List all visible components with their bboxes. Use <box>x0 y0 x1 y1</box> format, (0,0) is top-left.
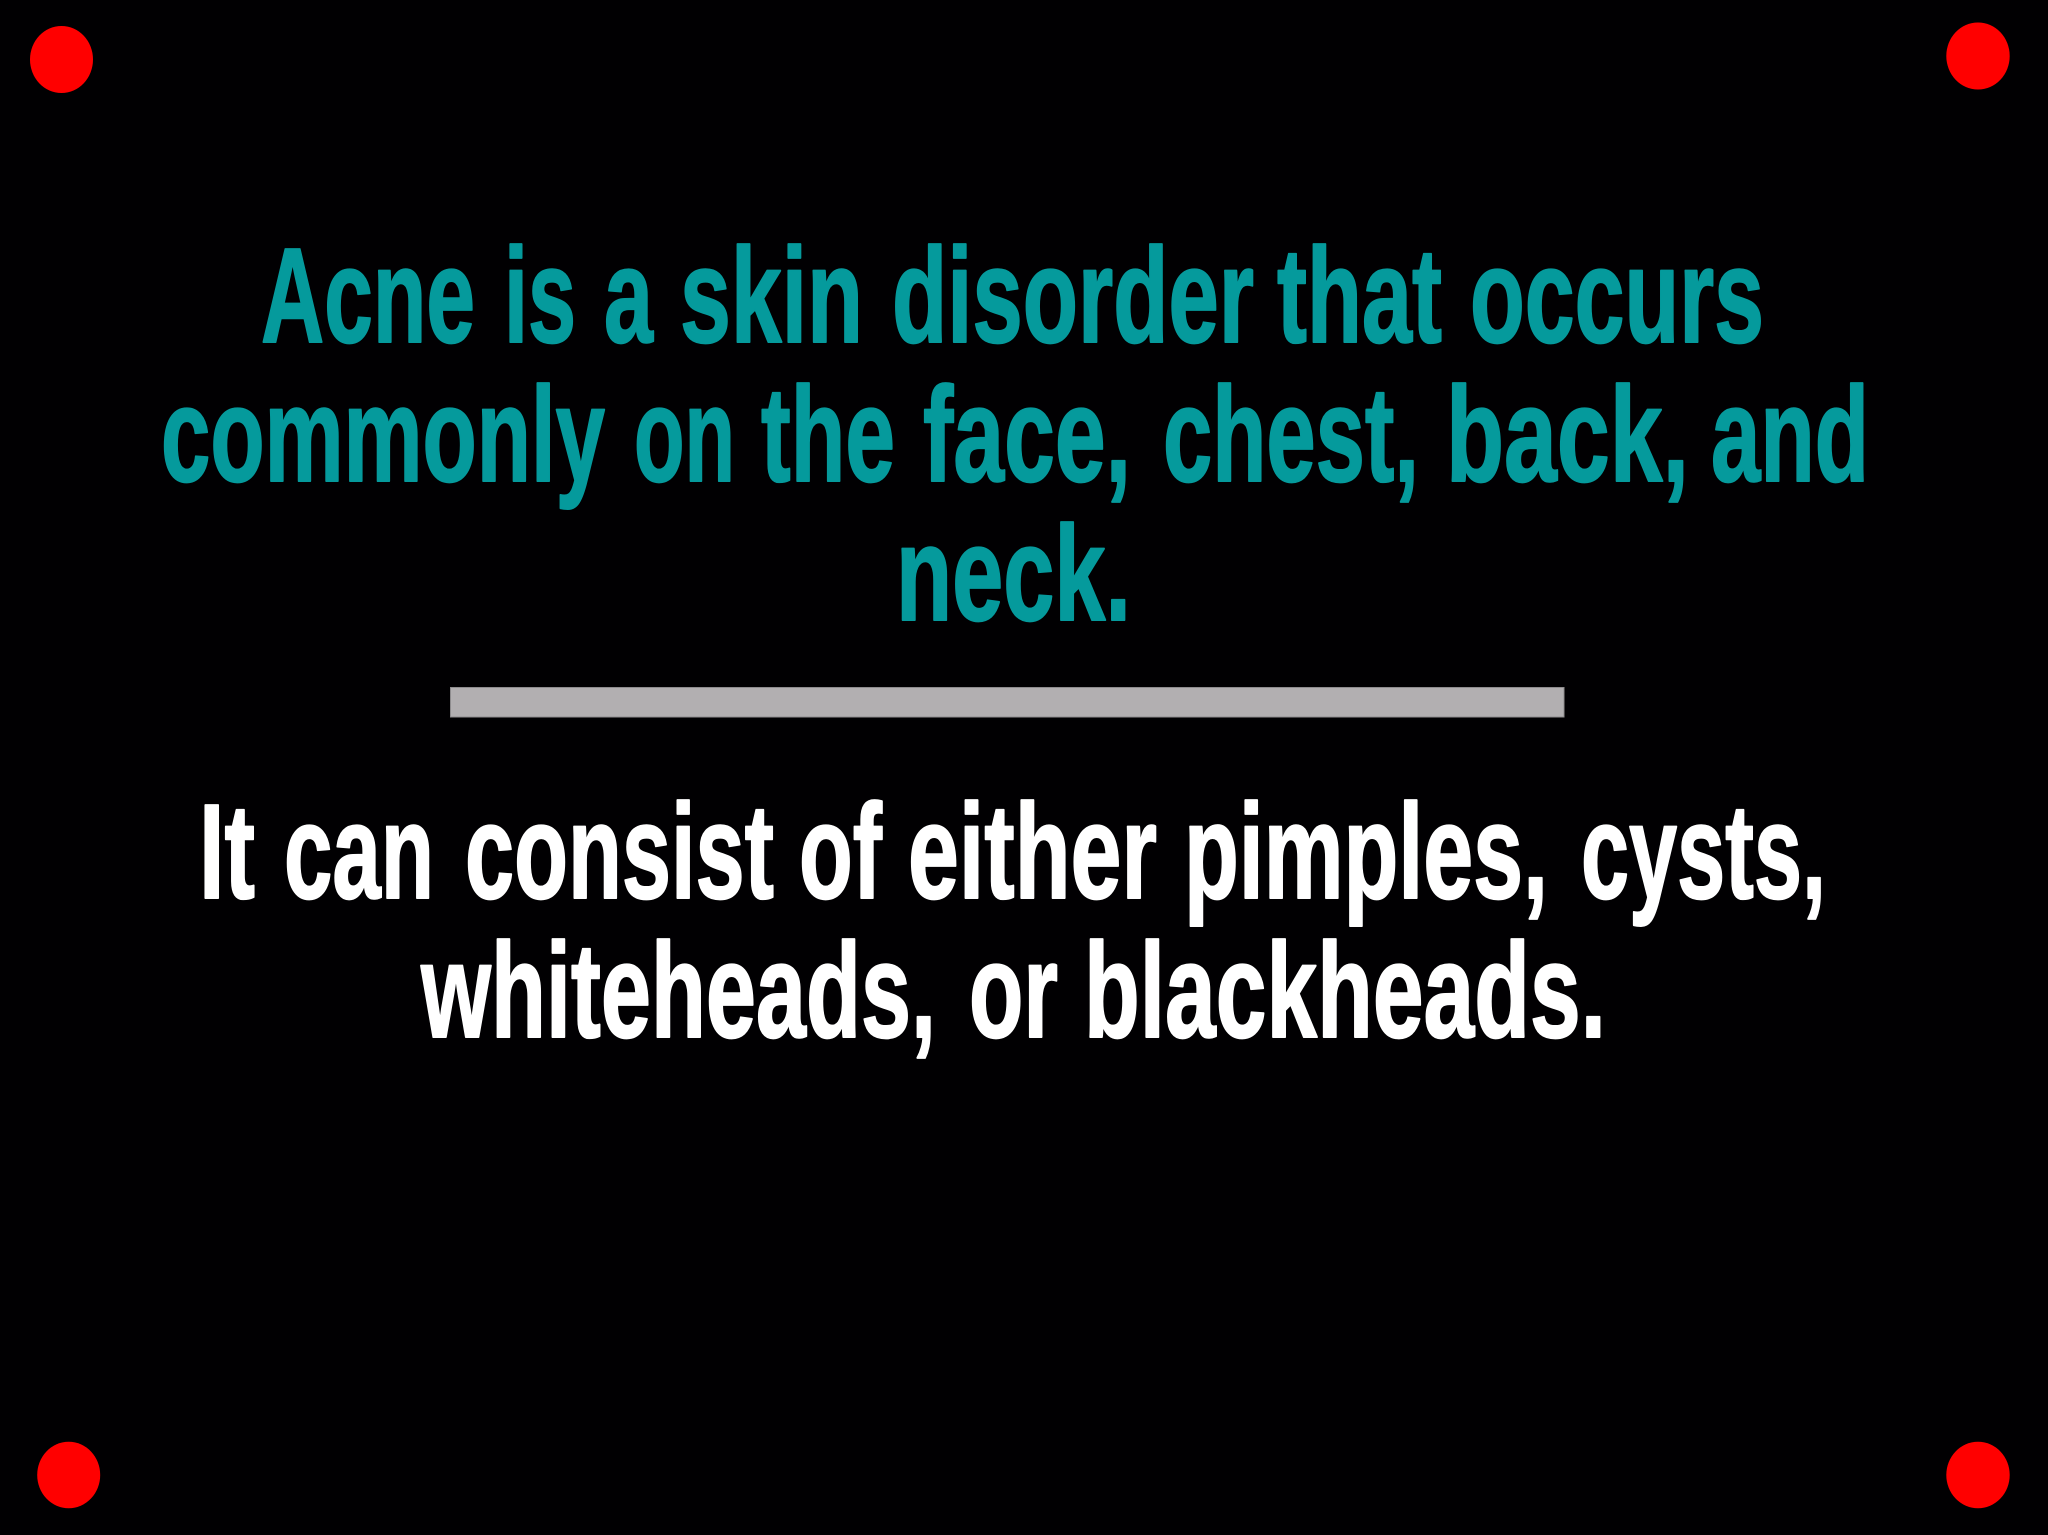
text block: acne types: pimples, <box>1184 776 1548 927</box>
text block: acne types <box>199 776 1826 1066</box>
text block: acne types: can <box>284 776 434 927</box>
heading: acne definition: face, <box>923 359 1131 510</box>
heading: acne definition: and <box>1711 359 1869 510</box>
heading: acne definition: the <box>761 359 895 510</box>
heading: acne definition: chest, <box>1163 359 1419 510</box>
icon: red dot top left <box>30 26 93 93</box>
text block: acne types: cysts, <box>1581 776 1826 927</box>
heading: acne definition: disorder <box>892 220 1254 371</box>
heading: acne definition: a <box>604 220 654 371</box>
heading: acne definition: that <box>1277 220 1442 371</box>
text block: acne types: of <box>799 776 883 927</box>
heading: acne definition: occurs <box>1470 220 1764 371</box>
heading: acne definition: commonly <box>161 359 605 510</box>
heading: acne definition <box>161 220 1869 649</box>
icon: red dot bottom right <box>1946 1442 2010 1508</box>
heading: acne definition: on <box>634 359 735 510</box>
heading: acne definition: Acne <box>261 220 475 371</box>
heading: acne definition: back, <box>1446 359 1689 510</box>
divider bar <box>450 688 1564 717</box>
heading: acne definition: skin <box>680 220 863 371</box>
text block: acne types: blackheads. <box>1084 915 1606 1066</box>
text block: acne types: either <box>908 776 1157 927</box>
text block: acne types: consist <box>465 776 774 927</box>
text block: acne types: whiteheads, <box>420 915 936 1066</box>
text block: acne types: It <box>199 776 255 927</box>
text block: acne types: or <box>969 915 1058 1066</box>
icon: red dot bottom left <box>37 1442 100 1508</box>
icon: red dot top right <box>1946 22 2010 90</box>
heading: acne definition: neck. <box>896 498 1131 649</box>
heading: acne definition: is <box>504 220 576 371</box>
